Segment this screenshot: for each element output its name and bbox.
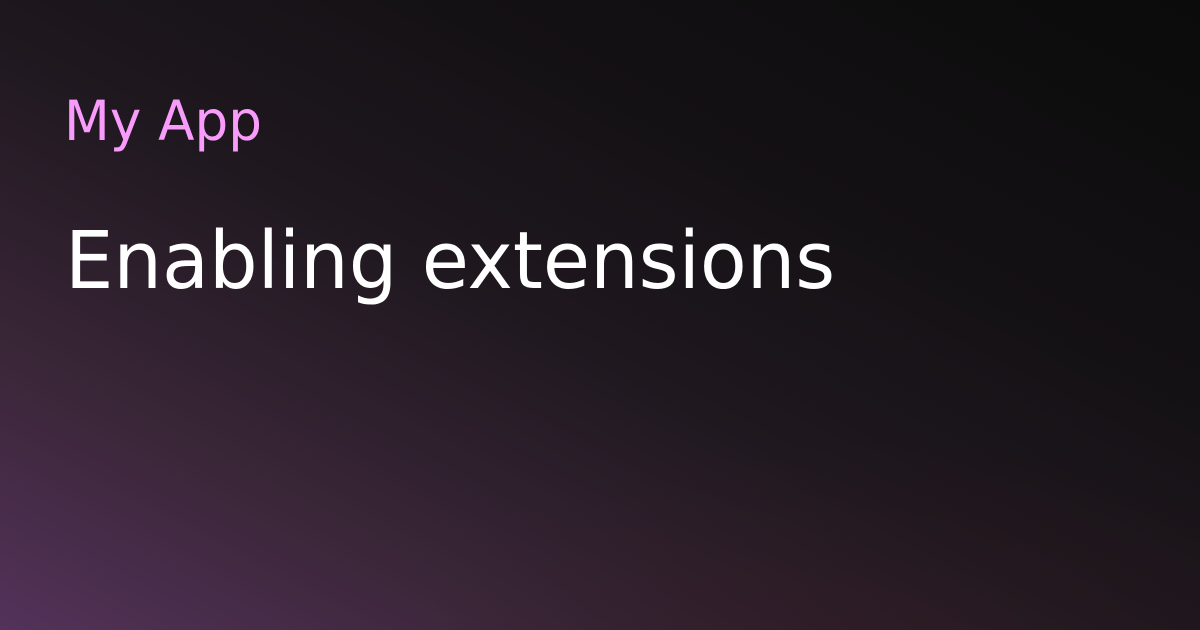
app name: My App <box>64 89 262 153</box>
page title: Enabling extensions <box>65 215 835 307</box>
